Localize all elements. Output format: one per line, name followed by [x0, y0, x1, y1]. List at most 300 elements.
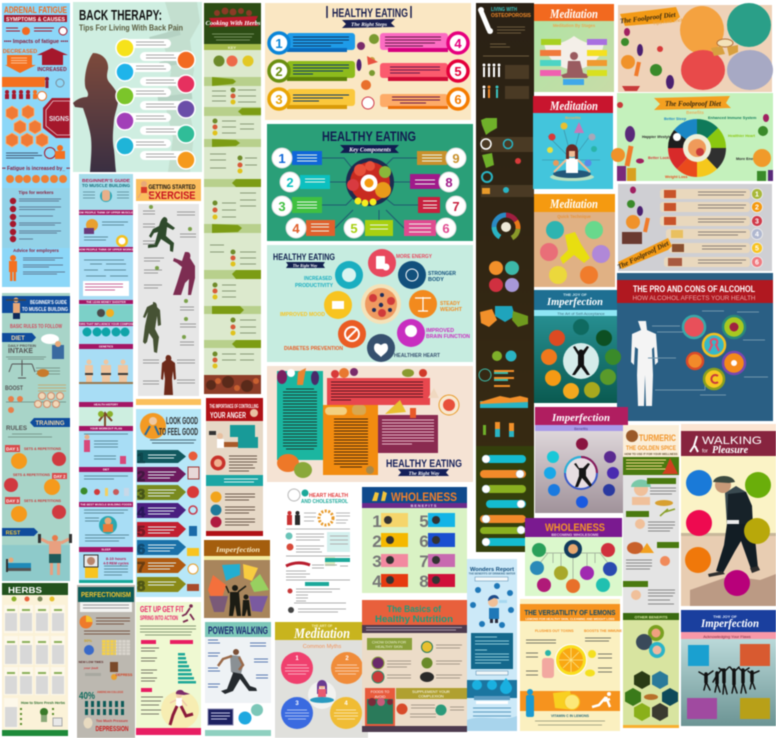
ring with figure	[565, 457, 597, 489]
panel: importance of controlling anger: YOUR ANGER	[210, 411, 246, 420]
labels: benefits: Enhanced Immune System	[708, 116, 757, 120]
heading: wonders report: Wonders Report	[470, 567, 514, 573]
tabs: eight benefits: 5	[419, 512, 429, 531]
steps 1 to 3: 1	[275, 36, 283, 51]
panel: wholeness benefits	[362, 487, 467, 593]
heading: nutrition	[375, 604, 453, 624]
circle: jumping person	[563, 343, 599, 379]
panel: healthy eating the right steps: The Right Steps	[351, 22, 387, 28]
heading: nutrition: The Basics of	[387, 604, 442, 614]
panel: cooking with herbs cards	[2, 583, 68, 736]
image strip: spices	[204, 375, 261, 394]
heading: versatility of lemons: THE VERSATILITY OF LEMONS	[524, 610, 616, 617]
heading: muscle building: BEGINNER'S GUIDE	[30, 300, 67, 306]
wedges	[208, 564, 269, 612]
heading: get up get fit: GET UP GET FIT	[140, 605, 184, 614]
rows: six habits: 1	[755, 192, 759, 198]
icons: people	[287, 511, 300, 525]
training days: SETS & REPETITIONS	[13, 473, 51, 477]
panel: adrenal fatigue: Advice for employers	[13, 248, 59, 253]
ring: risk factors	[494, 215, 518, 238]
heading: adrenal fatigue: ADRENAL FATIGUE	[4, 5, 67, 15]
panel: wonders report: THE BENEFITS OF DRINKING WATER	[469, 572, 515, 576]
arrows: eight tips: 7	[137, 559, 145, 576]
vegetables	[621, 28, 674, 91]
icons: benefits	[470, 583, 514, 628]
vegetables left	[611, 102, 644, 181]
panel: lemons: FLUSHES OUT TOXINS	[535, 629, 574, 633]
training days	[4, 445, 67, 522]
heading: look good: LOOK GOOD	[166, 416, 198, 427]
silhouettes: two figures	[226, 585, 251, 616]
icons: honeycomb	[636, 625, 665, 658]
arrow: rest	[2, 528, 38, 536]
heading: power walking: POWER WALKING	[208, 625, 268, 637]
heading: healthy eating right steps: HEALTHY EATING	[332, 6, 408, 20]
heading: foundations: Imperfection	[215, 546, 260, 554]
panel: healthy eating key components	[267, 124, 473, 241]
box: foods to avoid: AVOID	[375, 695, 386, 699]
herb cards	[4, 605, 65, 695]
steps 1 to 3: 2	[275, 64, 283, 79]
arrows: eight tips: 3	[137, 486, 145, 503]
tabs: eight benefits	[372, 512, 455, 591]
panel: muscle building plan: THE LEAN MONEY SHOOTER	[86, 300, 126, 304]
figure: muscleman with dumbbells	[38, 534, 72, 575]
figure: standing woman	[161, 355, 176, 395]
circles: components of diet	[489, 261, 519, 292]
panel: lemons	[520, 599, 623, 731]
panel: get up get fit: SPRING INTO ACTION	[140, 616, 178, 622]
boxes	[687, 644, 770, 719]
panel: back therapy	[73, 2, 202, 172]
box: supplement	[396, 688, 467, 716]
box: supplement: COMPLEXION	[418, 694, 444, 698]
figure: sprinter	[218, 649, 257, 694]
heading: meditation benefits: Meditation	[549, 98, 598, 113]
panel: heart health and cholesterol	[283, 486, 353, 620]
section bars	[79, 210, 133, 552]
arrows: eight tips: 5	[137, 523, 145, 540]
circles: myths: 2	[345, 656, 349, 662]
panel: healthy eating key components: 1	[278, 151, 286, 166]
rows: six habits: 2	[755, 204, 759, 212]
panel: get up get fit	[136, 602, 201, 735]
panel: healthy eating key components: 5	[350, 221, 358, 236]
tabs: eight benefits: 1	[372, 512, 382, 531]
benefit labels: STRONGER	[428, 271, 456, 277]
hexagons: signs	[6, 105, 48, 147]
panel: perfectionism: your fault	[83, 666, 99, 670]
panel: healthy eating the right way: The Right Way	[409, 472, 440, 477]
panel: getting started with exercise	[136, 179, 201, 405]
chart: increased arrow: INCREASED	[37, 67, 67, 73]
panel: foolproof diet habits	[616, 184, 772, 271]
heading: common myths	[293, 624, 350, 650]
panel: perfectionism: NEW LOW TIMES	[79, 660, 103, 664]
benefit labels: MORE ENERGY	[396, 254, 432, 260]
heading: perfectionism: PERFECTIONISM	[81, 590, 131, 599]
panel: cooking with herbs long	[204, 3, 261, 394]
panel: healthy eating key components: 6	[442, 221, 450, 236]
panel: pro and cons of alcohol	[617, 273, 773, 421]
panel: healthy eating key components: 2	[286, 175, 294, 190]
panel: adrenal fatigue: •• Fatigue is increased by_ ••	[2, 166, 70, 172]
box: note	[208, 709, 233, 725]
panel: muscle building plan: HOW PEOPLE THINK OF UPPER WORKS	[79, 248, 134, 252]
arrows: eight tips: 8	[137, 578, 145, 595]
panel: perfectionism: DEPRESSION	[96, 726, 128, 733]
panel: muscle building plan: SLEEP	[101, 548, 111, 552]
circles: steps	[540, 221, 610, 284]
nodes	[530, 543, 617, 593]
steps 1 to 3	[269, 33, 355, 109]
labels: benefits: More Energy	[736, 157, 760, 161]
panel: joy of imperfection flaws: Acknowledging Your Flaws	[703, 634, 751, 639]
panel: healthy eating key components: 7	[452, 199, 460, 214]
chart: decreased arrow: DECREASED	[3, 49, 37, 55]
circles: myths	[281, 652, 363, 729]
heading: walking for pleasure: for	[702, 448, 708, 454]
key icons	[214, 56, 254, 66]
box: supplement: SUPPLEMENT YOUR	[412, 690, 450, 694]
heading: common myths: THE ART OF	[312, 624, 333, 628]
panel: look good to feel good	[136, 409, 201, 597]
tabs: components	[292, 151, 447, 236]
heading: exercise	[138, 181, 196, 202]
training days: DAY 2	[54, 474, 66, 479]
ribbon: habits: The Foolproof Diet	[616, 239, 671, 271]
labels: benefits: Better Looks	[648, 156, 671, 160]
box: water text	[471, 633, 513, 669]
panel: basics of healthy nutrition	[362, 600, 467, 732]
panel: muscle building plan: THE BEST MUSCLE BUILDING FOODS	[80, 502, 132, 506]
heading: wholeness: WHOLENESS	[545, 522, 605, 534]
panel: pro and cons of alcohol: HOW ALCOHOL AFFECTS YOUR HEALTH	[632, 295, 756, 302]
rows: six habits: 5	[755, 246, 759, 252]
figure: runner two	[143, 302, 161, 353]
panel: beginner's guide to muscle building: DAILY PROTEIN	[8, 343, 36, 348]
panel: muscle building plan: DIET	[103, 468, 109, 472]
block: how to store fresh herbs	[4, 698, 66, 728]
heading: wholeness benefits: WHOLENESS	[391, 490, 457, 504]
panel: turmeric golden spice: OTHER BENEFITS	[634, 616, 668, 620]
icon: sleeping man	[84, 555, 98, 578]
panel: healthy eating benefits	[267, 245, 473, 362]
panel: lemons: VITAMIN C IN LEMONS	[551, 714, 590, 718]
panel: healthy eating key components: 3	[278, 199, 286, 214]
heading: meditation: Meditation	[549, 6, 598, 21]
rows: six habits: 6	[755, 260, 759, 266]
panel: joy of imperfection foundations	[204, 540, 270, 618]
steps 1 to 3: 3	[275, 92, 283, 107]
panel: muscle building plan: TO MUSCLE BUILDING	[82, 183, 130, 188]
heading: look good: TO FEEL GOOD	[159, 427, 198, 438]
panel: meditation by stages: Meditation By Stages	[553, 23, 596, 28]
panel: muscle building plan: 8-10 hours	[106, 556, 127, 561]
panel: adrenal fatigue: Tips for workers	[19, 190, 54, 195]
arrows: eight tips	[137, 450, 186, 595]
panel: back therapy: Tips For Living With Back Pain	[79, 24, 183, 32]
icons	[187, 452, 199, 591]
arrow: rest: REST	[6, 530, 21, 536]
panel: foolproof diet tips	[618, 3, 773, 92]
panel: walking for pleasure	[681, 424, 776, 606]
heading: heart health	[288, 489, 349, 505]
panel: adrenal fatigue: SIGNS	[49, 114, 69, 123]
silhouettes: group of people	[699, 667, 759, 694]
panel: joy of imperfection self acceptance: The Art of Self-Acceptance	[557, 311, 606, 316]
chart: pie	[80, 616, 92, 628]
steps 4 to 6: 4	[454, 36, 462, 51]
silhouette: person with back pain	[73, 53, 118, 172]
panel: adrenal fatigue	[2, 3, 70, 287]
heading: common myths: Common Myths	[303, 644, 342, 650]
benefit labels: PRODUCTIVITY	[295, 283, 333, 289]
heading: turmeric	[624, 430, 678, 456]
heading: exercise: GETTING STARTED	[148, 185, 196, 191]
panel: perfectionism: AMERICAN COLLEGE	[97, 691, 124, 694]
satellites	[541, 319, 621, 399]
satellites	[544, 438, 619, 508]
stat: forty percent: 40%	[79, 690, 96, 702]
number badges	[272, 148, 466, 238]
panel: foolproof diet tips: Tips And Tricks	[653, 17, 687, 26]
circles: tips	[680, 3, 773, 90]
ribbon: benefits: The Foolproof Diet	[665, 100, 722, 108]
heading: right way: HEALTHY EATING	[386, 458, 462, 470]
bed	[6, 558, 31, 572]
panel: muscle building plan: YOUR WORKOUT PLAN	[90, 426, 122, 430]
labels: benefits: Better Sleep	[664, 117, 687, 121]
pan illustration	[346, 158, 394, 206]
silhouette: human body	[631, 321, 658, 406]
block: how to store fresh herbs: How to Store Fresh Herbs	[21, 700, 66, 705]
list: ten tips	[116, 39, 195, 169]
arrows: eight tips: 1	[137, 450, 145, 467]
training days: DAY 3	[6, 498, 19, 504]
chart: yellow grid	[102, 640, 130, 655]
panel: foolproof diet benefits: Benefits	[686, 110, 704, 115]
heading: osteoporosis: LIVING WITH	[491, 7, 517, 13]
panel: perfectionism: DEPRESS	[116, 673, 133, 677]
heading: quick technique: Meditation	[549, 196, 598, 211]
panel: adrenal fatigue: SYMPTOMS & CAUSES	[6, 17, 66, 23]
benefit labels: BRAIN FUNCTION	[426, 334, 470, 340]
heading: turmeric: TURMERIC	[639, 433, 676, 444]
ribbon: benefits	[654, 96, 731, 110]
heading: anger: THE IMPORTANCE OF CONTROLLING	[210, 404, 259, 410]
panel: joy of imperfection benefits	[535, 407, 628, 513]
heading: BEGINNER'S GUIDE	[82, 178, 130, 183]
panel: muscle building plan: FACTORS THAT INFLUENCE YOUR COMPOSITION	[72, 322, 140, 326]
labels: benefits: Healthier Heart	[728, 134, 756, 138]
benefit labels: WEIGHT	[440, 307, 463, 313]
benefit labels: DIABETES PREVENTION	[284, 346, 343, 352]
heading: heart health: HEART HEALTH	[309, 493, 348, 499]
panel: foolproof diet benefits	[611, 93, 773, 181]
panel: beginner's guide to muscle building	[2, 293, 72, 581]
heading: joy of imperfection: Imperfection	[546, 296, 603, 308]
tabs: eight benefits: 2	[372, 532, 382, 551]
tabs: eight benefits: 4	[372, 572, 382, 591]
figure: runner	[148, 217, 175, 252]
panel: healthy eating key components: Key Components	[348, 148, 392, 154]
note: steps to take	[288, 582, 346, 613]
heading: walking for pleasure: WALKING	[702, 435, 762, 447]
hex row	[480, 306, 528, 327]
panel: importance of controlling anger	[206, 398, 263, 536]
panel: perfectionism	[77, 585, 135, 738]
panel: meditation benefits: Benefits	[565, 115, 582, 120]
list: tips for osteoporosis	[480, 455, 530, 546]
illustrations	[84, 219, 128, 247]
panel: meditation by stages	[534, 4, 614, 92]
panel: perfectionism: Too Much Pressure	[96, 718, 129, 723]
heading: walking for pleasure	[690, 435, 762, 456]
panel: cooking with herbs long: KEY	[228, 45, 236, 50]
panel: perfectionism: 90%	[84, 638, 92, 643]
panel: living with osteoporosis	[476, 3, 534, 552]
figure: running woman	[170, 690, 193, 725]
box: healthy skin: HEALTHY SKIN	[375, 645, 403, 649]
panel: beginner's guide to muscle building: BOOST	[5, 386, 23, 392]
chart: teal bars	[178, 653, 196, 684]
tabs: eight benefits: 6	[419, 532, 429, 551]
hexagons: other benefits	[625, 671, 678, 721]
panel: beginner's guide to muscle building: RULES	[6, 426, 27, 432]
circles: myths: 3	[295, 701, 299, 707]
steps 4 to 6: 6	[454, 92, 462, 107]
heading: key components: HEALTHY EATING	[322, 128, 416, 144]
circles: myths: 4	[344, 701, 348, 707]
rows: six habits	[660, 188, 762, 268]
chart: benefits wheel	[668, 119, 726, 177]
circles: myths: 1	[295, 656, 299, 662]
training days: SETS & REPETITIONS	[24, 499, 62, 503]
tabs: eight benefits: 3	[372, 552, 382, 571]
training days: DAY 1	[6, 446, 19, 452]
ribbon: tips: The Foolproof Diet	[619, 11, 677, 25]
panel: lemons: BOOSTS THE IMMUNE	[584, 629, 623, 633]
figure: boy drinking	[488, 595, 507, 623]
panel: muscle building plan	[72, 174, 140, 583]
benefit labels: INCREASED	[304, 276, 332, 282]
labels: benefits	[642, 116, 760, 179]
heading: cooking with herbs: HERBS	[8, 586, 43, 595]
panel: joy of imperfection self acceptance: THE JOY OF	[563, 292, 587, 297]
panel: meditation quick technique: Quick Technique	[557, 214, 591, 219]
ribbon: cooking with herbs	[206, 16, 261, 27]
panel: power walking	[205, 622, 271, 736]
benefit labels	[280, 254, 470, 359]
figure: blue body	[526, 689, 534, 717]
box: healthy skin: CHOW DOWN FOR	[372, 640, 406, 644]
panel: lemons: LEMONS FOR HEALTHY SKIN, CLEANING AND WEIGHT LOSS	[525, 617, 615, 621]
box: healthy skin	[367, 638, 412, 650]
box: foods to avoid: FOODS TO	[371, 690, 390, 694]
panel: healthy eating key components: 4	[292, 221, 300, 236]
panel: meditation benefits	[533, 96, 613, 189]
panel: muscle building plan: HOW PEOPLE THINK OF UPPER MUSCLES	[77, 210, 135, 214]
arrow: training	[30, 418, 70, 427]
heading: look good	[140, 413, 198, 439]
panel: healthy eating key components: 9	[452, 151, 460, 166]
icon: angry face	[210, 456, 226, 470]
note: fruit	[327, 368, 430, 405]
panel: joy of imperfection flaws	[681, 610, 776, 726]
heading: exercise: EXERCISE	[148, 190, 196, 202]
benefit labels: IMPROVED MOOD	[280, 312, 325, 318]
heading: flaws: Imperfection	[700, 616, 759, 630]
key	[12, 596, 54, 602]
rows: six habits: 4	[755, 232, 759, 238]
figure: woman meditating	[550, 144, 594, 181]
arrow: training: TRAINING	[36, 421, 65, 427]
band: water drops	[467, 678, 517, 698]
heading: healthy eating right way: HEALTHY EATING	[273, 252, 335, 262]
benefit labels: IMPROVED	[426, 328, 454, 334]
panel: muscle building plan: GENETICS	[99, 344, 113, 348]
heading: turmeric: THE GOLDEN SPICE	[626, 446, 676, 452]
panel: wholeness becoming wholesome	[525, 518, 622, 596]
panel: wholeness becoming wholesome: BECOMING WHOLESOME	[551, 533, 599, 537]
panel: meditation common myths	[275, 622, 368, 738]
tabs: eight benefits: 7	[419, 552, 429, 571]
chart: decreased arrow	[3, 49, 37, 73]
panel: wonders report	[467, 559, 517, 731]
figure: woman with dumbbell	[173, 252, 195, 295]
steps 4 to 6: 5	[454, 64, 462, 79]
photo: walking man	[708, 476, 760, 577]
panel: joy of imperfection self acceptance	[534, 290, 621, 403]
icon: employee figure	[9, 255, 17, 281]
panel: muscle building plan: 4-5 REM cycles	[103, 562, 129, 566]
body: torso	[542, 650, 554, 678]
heading: heart health: AND CHOLESTEROL	[301, 499, 349, 505]
panel: beginner's guide to muscle building: TO MUSCLE BUILDING	[22, 307, 68, 313]
panel: adrenal fatigue: •••• Impacts of fatigue ••••	[4, 39, 68, 45]
figure: yoga pose	[560, 232, 590, 264]
callouts	[143, 205, 196, 384]
panel: healthy eating the right steps	[265, 3, 471, 120]
labels: benefits: Weight Loss	[665, 175, 688, 179]
organ circles	[683, 316, 745, 389]
panel: healthy eating benefits: The Right Way	[293, 263, 317, 268]
panel: wholeness benefits: BENEFITS	[411, 504, 437, 508]
desk scene	[209, 431, 238, 448]
lemon wedges and runner	[553, 691, 611, 710]
benefit bubbles	[324, 249, 437, 362]
panel: muscle building plan: HEALTH HISTORY	[94, 402, 118, 406]
pizza	[361, 284, 401, 324]
area chart	[480, 396, 528, 408]
note: meat	[323, 405, 378, 475]
node: central face	[564, 540, 582, 558]
panel: beginner's guide to muscle building: BASIC RULES TO FOLLOW	[10, 324, 62, 330]
tabs: stages	[540, 39, 607, 85]
panel: healthy eating key components: 8	[445, 175, 453, 190]
heading: turmeric: HOW TO USE IT FOR YOUR WELLNESS	[624, 452, 678, 456]
food: pizza and lasagne	[711, 39, 738, 56]
arrows: eight tips: 4	[137, 504, 146, 521]
arrow: diet	[2, 333, 36, 342]
arrows: eight tips: 2	[137, 468, 145, 485]
box: foods to avoid	[365, 688, 395, 726]
circles: walking benefits	[685, 470, 771, 596]
rows: six habits: 3	[755, 218, 759, 226]
training days: SETS & REPETITIONS	[24, 447, 62, 451]
